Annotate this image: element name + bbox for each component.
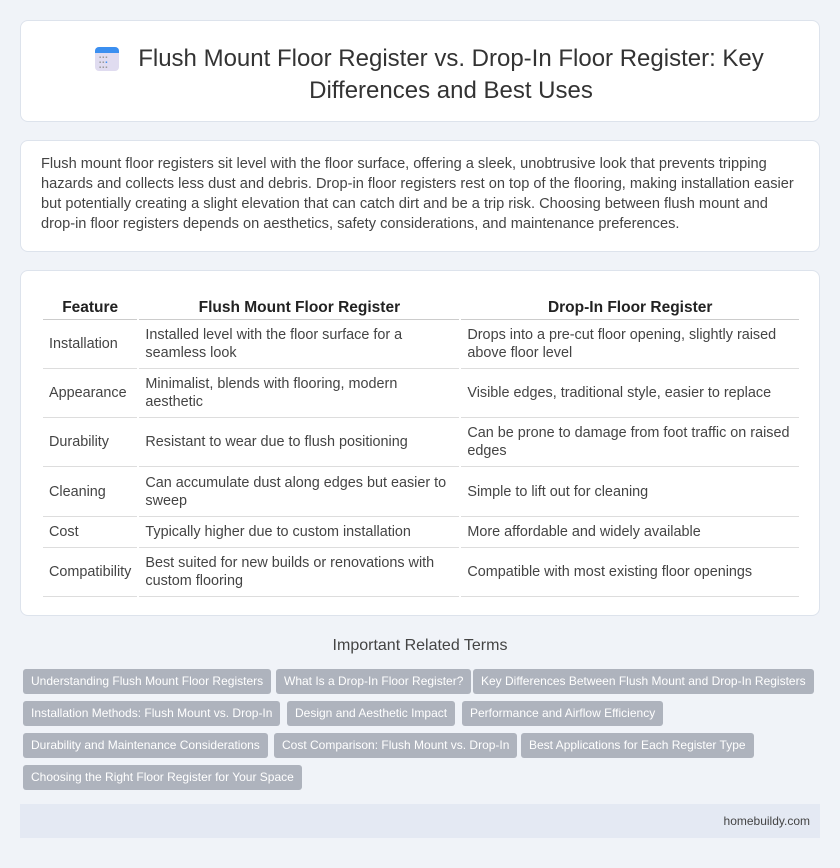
comparison table: More affordable and widely available	[467, 524, 701, 540]
comparison table: Cleaning	[49, 484, 106, 500]
icon: calendar: ▪▪▪	[99, 65, 108, 71]
related term tags: Best Applications for Each Register Type	[529, 738, 746, 752]
intro text	[20, 140, 820, 252]
comparison table: Resistant to wear due to flush positioning	[145, 434, 408, 450]
comparison table: Appearance	[49, 385, 127, 401]
comparison table: Drops into a pre-cut floor opening, slightly raised above floor level	[467, 327, 776, 361]
related term tags: Choosing the Right Floor Register for Your Space	[31, 770, 294, 784]
comparison table: Can be prone to damage from foot traffic on raised edges	[467, 425, 790, 459]
related term tags: Durability and Maintenance Considerations	[31, 738, 260, 752]
related term tags: Understanding Flush Mount Floor Registers	[31, 674, 263, 688]
comparison table: Minimalist, blends with flooring, modern aesthetic	[145, 376, 397, 410]
related term tags: Performance and Airflow Efficiency	[470, 706, 655, 720]
footer	[20, 804, 820, 838]
comparison table: Flush Mount Floor Register	[199, 298, 400, 316]
related term tags: Key Differences Between Flush Mount and Drop-In Registers	[481, 674, 806, 688]
title: Flush Mount Floor Register vs. Drop-In Floor Register: Key Differences and Best Uses	[138, 45, 764, 104]
comparison table	[20, 270, 820, 616]
related term tags: Cost Comparison: Flush Mount vs. Drop-In	[282, 738, 509, 752]
related term tags: Design and Aesthetic Impact	[295, 706, 447, 720]
related terms heading: Important Related Terms	[333, 637, 507, 654]
related term tags: What Is a Drop-In Floor Register?	[284, 674, 463, 688]
comparison table: Cost	[49, 524, 79, 540]
icon: calendar: ▪▪▪	[99, 55, 108, 61]
comparison table: Visible edges, traditional style, easier to replace	[467, 385, 771, 401]
related term tags: Installation Methods: Flush Mount vs. Drop-In	[31, 706, 272, 720]
comparison table: Can accumulate dust along edges but easier to sweep	[145, 474, 446, 508]
comparison table: Compatible with most existing floor openings	[467, 564, 752, 580]
footer: homebuildy.com	[724, 814, 810, 828]
comparison table: Installed level with the floor surface for a seamless look	[145, 327, 402, 361]
comparison table: Installation	[49, 336, 118, 352]
comparison table: Feature	[62, 298, 118, 316]
comparison table: Compatibility	[49, 564, 131, 580]
comparison table: Drop-In Floor Register	[548, 298, 712, 316]
comparison table: Simple to lift out for cleaning	[467, 484, 648, 500]
comparison table: Best suited for new builds or renovations with custom flooring	[145, 555, 434, 589]
intro text: Flush mount floor registers sit level with the floor surface, offering a sleek, unobtrusive look that prevents tripping hazards and collects less dust and debris. Drop-in floor registers rest on top of the flooring, making installation easier but potentially creating a slight elevation that can catch dirt and be a trip risk. Choosing between flush mount and drop-in floor registers depends on aesthetics, safety considerations, and maintenance preferences.	[41, 156, 794, 232]
icon: calendar	[95, 47, 119, 71]
comparison table: Durability	[49, 434, 109, 450]
header card	[20, 20, 820, 122]
icon: calendar: ▪▪▪	[99, 60, 108, 66]
comparison table: Typically higher due to custom installation	[145, 524, 411, 540]
